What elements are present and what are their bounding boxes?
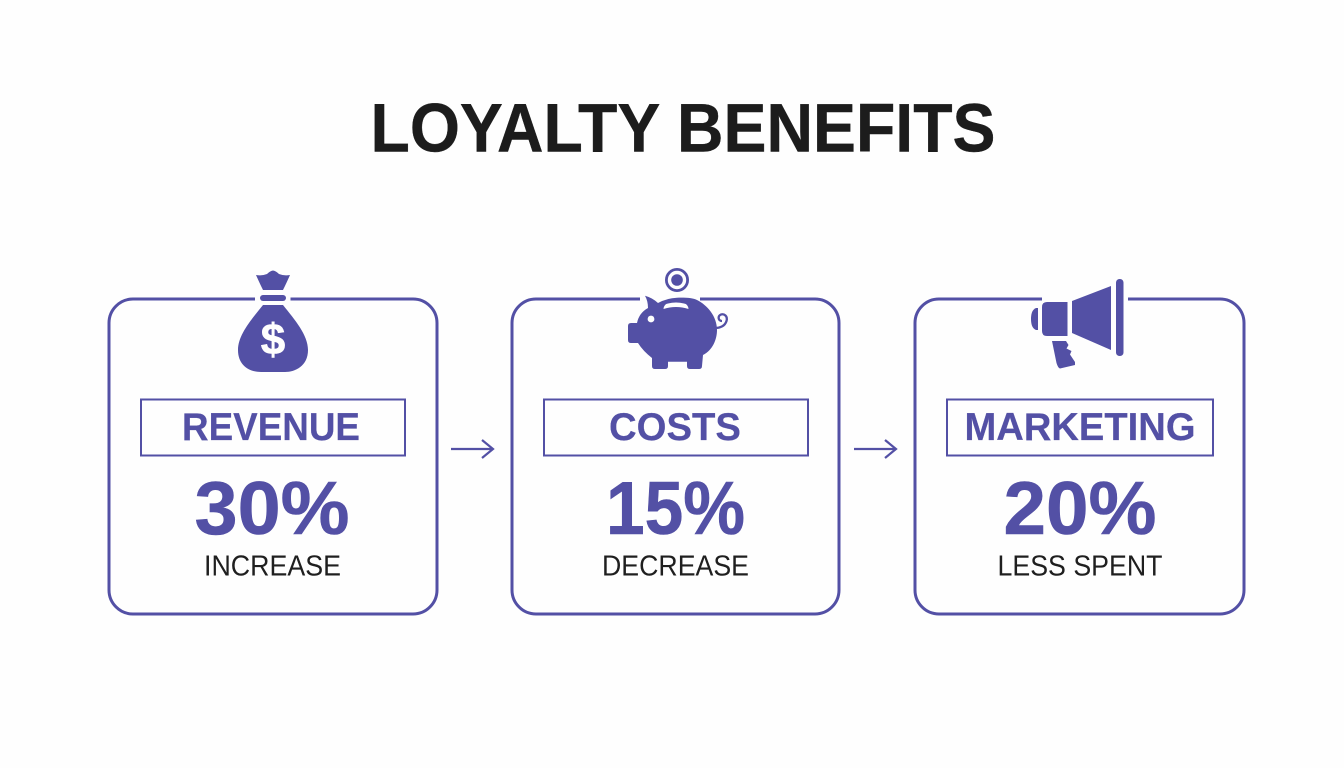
- label box: costs: COSTS: [609, 406, 741, 449]
- caption: decrease: DECREASE: [602, 550, 749, 582]
- label box: revenue: REVENUE: [182, 406, 360, 449]
- arrow: costs to marketing: [854, 440, 896, 458]
- label box: marketing: MARKETING: [964, 406, 1196, 449]
- panel outline: revenue: [109, 299, 437, 614]
- icon: megaphone: [1031, 279, 1124, 368]
- panel outline: costs: [512, 299, 839, 614]
- panel: marketing: [915, 279, 1244, 614]
- label box: revenue: [141, 400, 405, 456]
- label box: marketing: [947, 400, 1213, 456]
- icon: piggy bank: [628, 269, 727, 369]
- panel: costs: [512, 269, 839, 614]
- stat: 15%: 15%: [606, 466, 745, 550]
- caption: less spent: LESS SPENT: [998, 550, 1162, 582]
- label box: costs: [544, 400, 808, 456]
- stat: 20%: 20%: [1004, 466, 1156, 550]
- title: LOYALTY BENEFITS: [370, 90, 996, 166]
- arrow: revenue to costs: [451, 440, 493, 458]
- panel outline: marketing: [915, 299, 1244, 614]
- icon: money bag: $: [261, 316, 285, 364]
- panel: revenue: [109, 270, 437, 614]
- caption: increase: INCREASE: [204, 550, 341, 582]
- icon: money bag: [238, 270, 308, 372]
- stat: 30%: 30%: [194, 466, 350, 550]
